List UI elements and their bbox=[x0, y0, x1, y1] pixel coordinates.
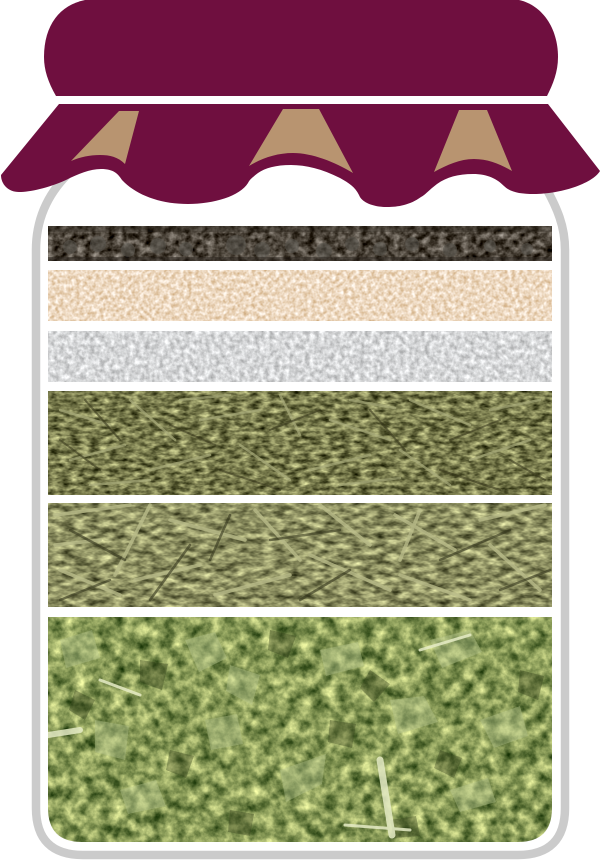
cloth lid: tan fold left bbox=[71, 111, 139, 164]
layer: garlic granules bbox=[48, 270, 552, 321]
cloth lid: scalloped skirt bbox=[1, 104, 600, 207]
cloth lid: tan fold center bbox=[249, 109, 353, 173]
cloth lid: top dome bbox=[44, 0, 558, 96]
jar outline bbox=[36, 174, 565, 855]
cloth lid: tan fold right bbox=[434, 110, 512, 172]
layer: coarse salt bbox=[48, 331, 552, 382]
layer: thyme bbox=[48, 391, 552, 495]
layer: sage bbox=[48, 617, 552, 842]
layer: black peppercorns bbox=[48, 226, 552, 261]
layer: rosemary bbox=[48, 503, 552, 607]
